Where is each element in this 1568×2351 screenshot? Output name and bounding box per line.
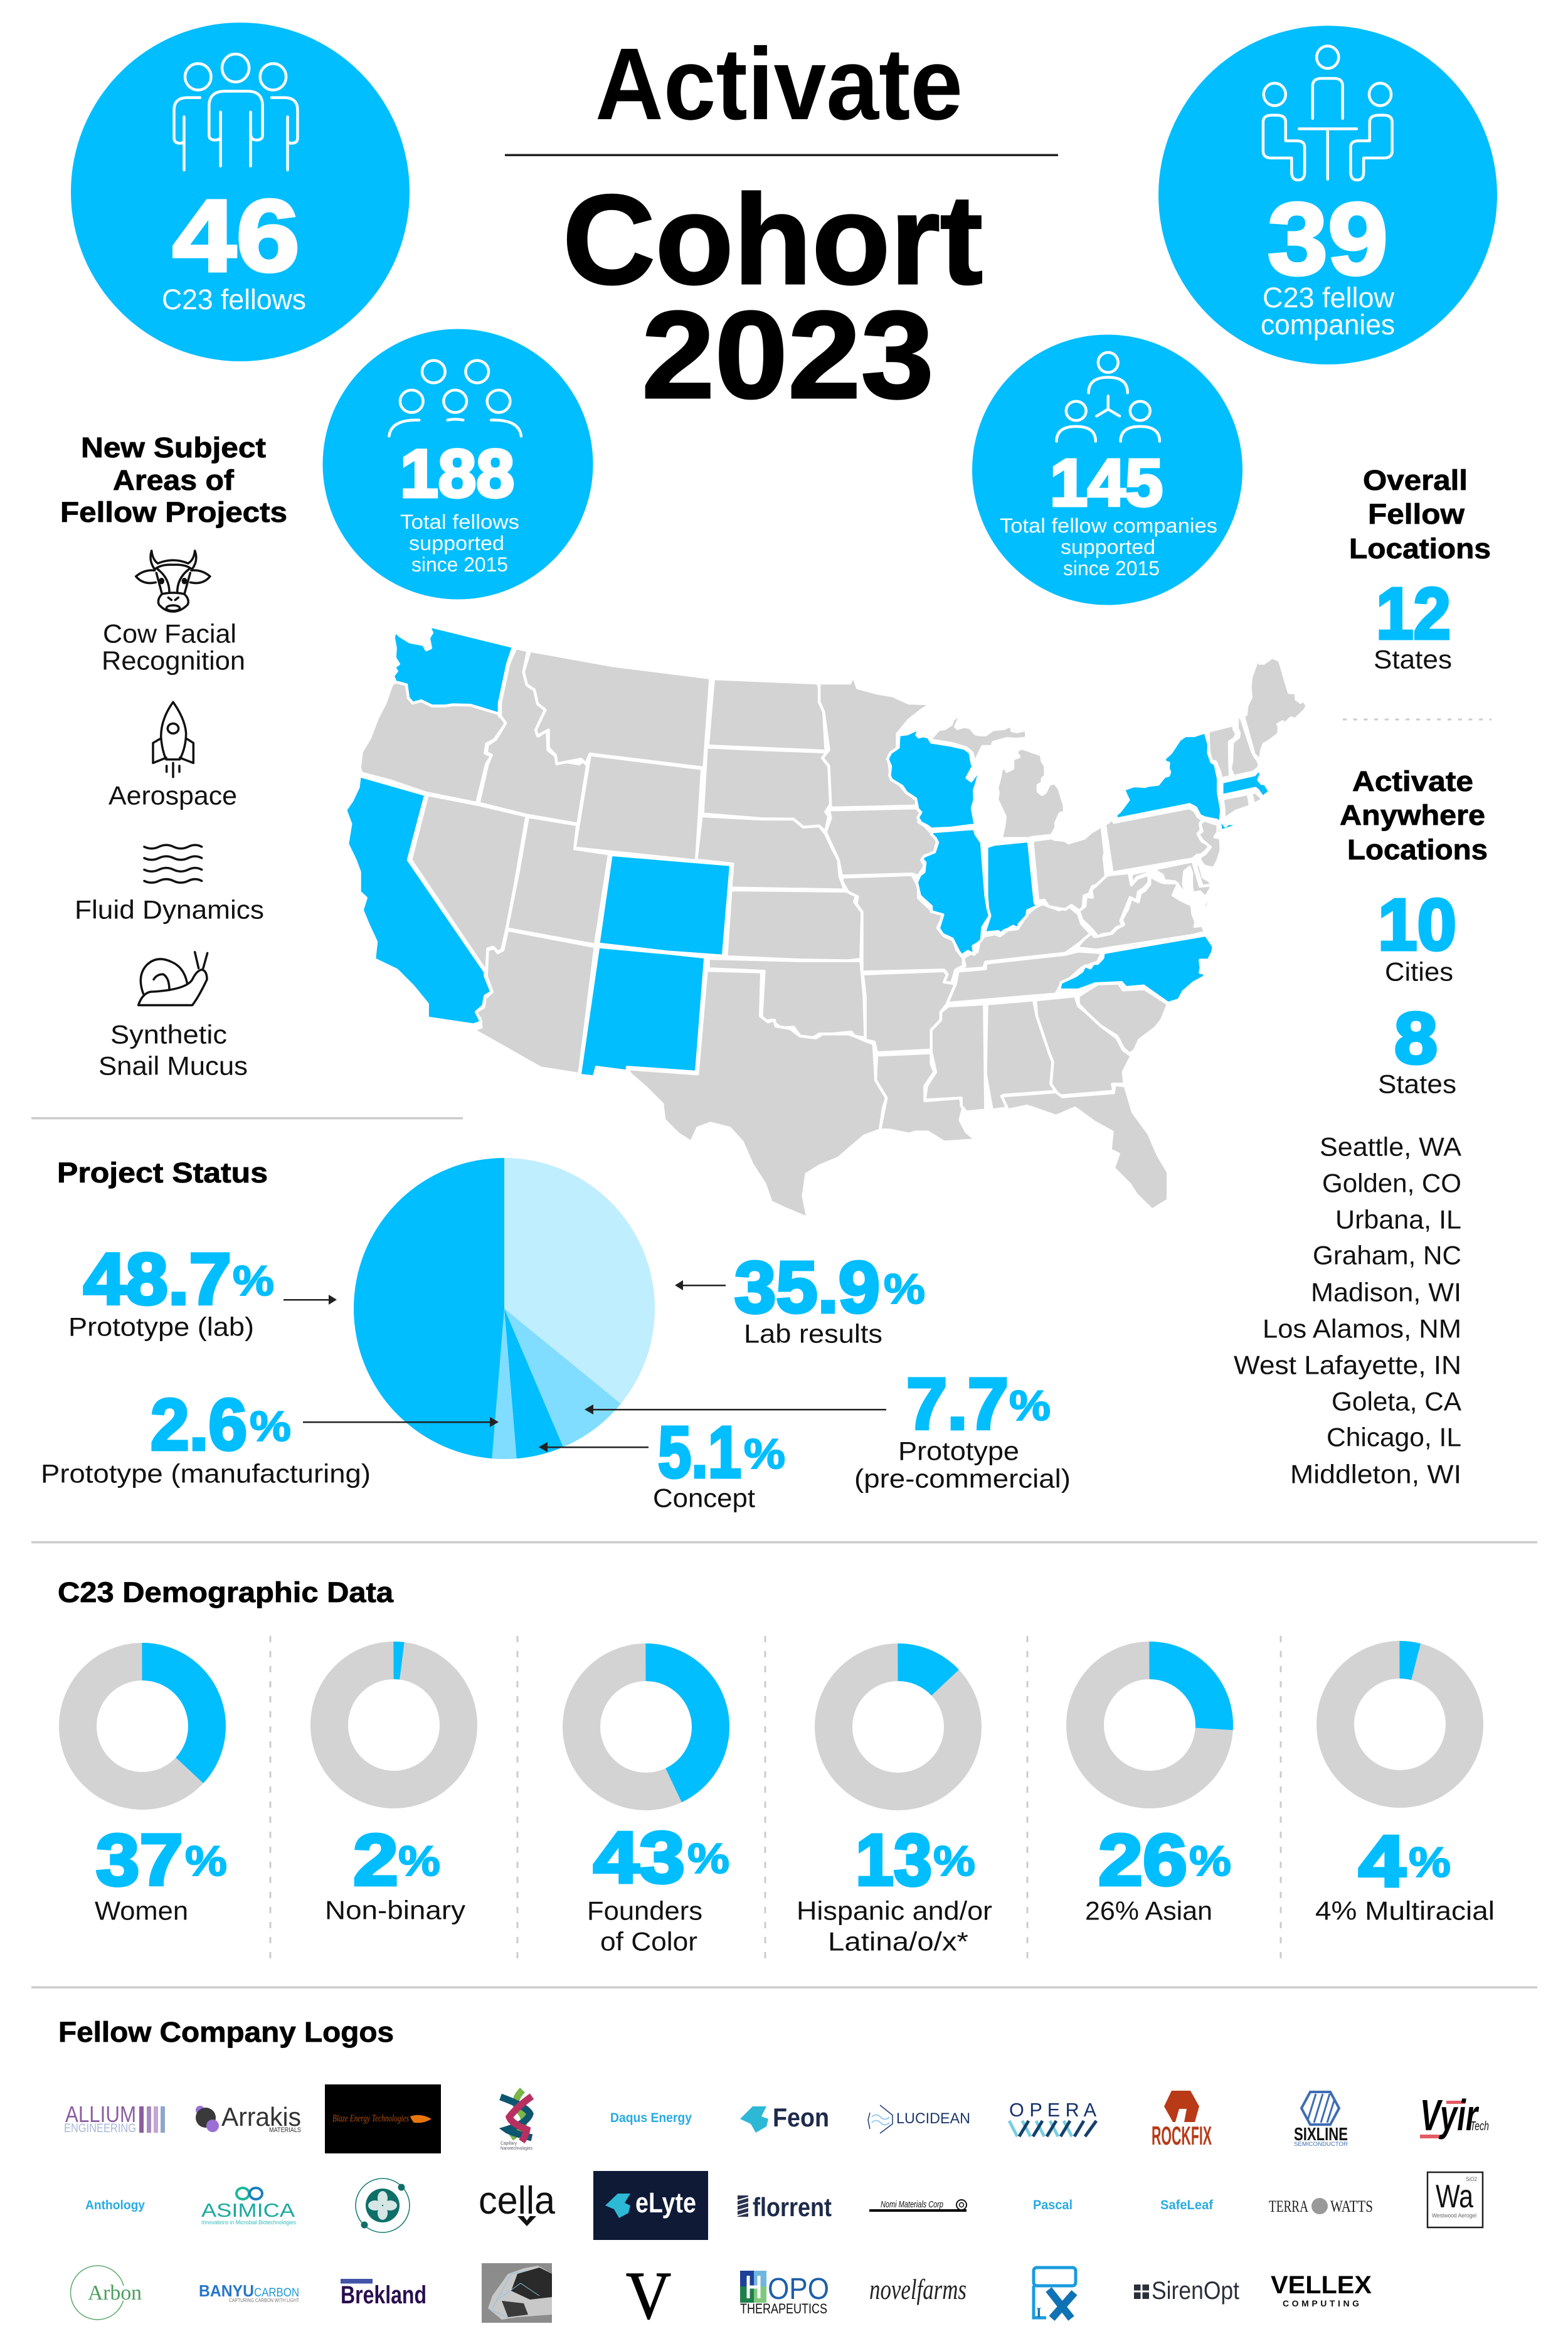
donut: founders of color 43%: 43 <box>593 1817 685 1898</box>
logo: Terra Watts <box>1269 2197 1373 2216</box>
callout: 35.9% lab results: 35.9 <box>734 1246 880 1328</box>
city list: Urbana, IL <box>1335 1204 1461 1234</box>
logo: Arrakis Materials: MATERIALS <box>269 2126 301 2134</box>
logo: Capillary Nanotechnologies: Nanotechnologies <box>501 2147 532 2151</box>
gray states: Michigan and Ohio <box>931 713 1106 911</box>
logo: Allium Engineering: ENGINEERING <box>64 2122 136 2135</box>
logo: SafeLeaf: SafeLeaf <box>1160 2198 1214 2212</box>
logo: Westwood Aerogel <box>1428 2172 1483 2227</box>
donut: founders of color 43%: Founders <box>587 1896 702 1926</box>
highlighted state: Wisconsin <box>887 729 980 829</box>
callout: 7.7% prototype pre-commercial <box>854 1363 1071 1493</box>
logo: novelfarms: novelfarms <box>869 2273 967 2305</box>
panel: new subject areas <box>60 432 287 1080</box>
logo: Vellex Computing: VELLEX <box>1271 2271 1372 2299</box>
arrow <box>283 1295 337 1305</box>
icon: waves <box>144 845 202 883</box>
stat circle: 145 total fellow companies: since 2015 <box>1063 557 1160 580</box>
panel: overall fellow locations: States <box>1374 645 1452 674</box>
logo: Westwood Aerogel: Westwood Aerogel <box>1432 2212 1476 2219</box>
panel: fellow company logos <box>58 2016 1489 2333</box>
city list: Golden, CO <box>1322 1168 1461 1198</box>
panel: new subject areas: Recognition <box>102 646 245 675</box>
heading: activate anywhere locations <box>1340 765 1488 866</box>
heading: new subject areas <box>60 432 287 528</box>
stat circle: 188 total fellows: since 2015 <box>411 553 508 576</box>
donut: hispanic and/or latina/o/x 13% <box>797 1662 992 1956</box>
panel: activate anywhere locations: 8 <box>1394 997 1438 1079</box>
donut: hispanic and/or latina/o/x 13%: 13 <box>856 1819 932 1901</box>
highlighted state: Colorado <box>598 855 731 956</box>
donut: founders of color 43%: of Color <box>600 1927 697 1956</box>
title: Cohort <box>563 169 983 311</box>
highlighted state: North Carolina <box>1059 935 1214 1003</box>
heading: activate anywhere locations: Activate <box>1352 765 1473 797</box>
logo: SirenOpt: SirenOpt <box>1152 2277 1239 2305</box>
donut: asian 26% <box>1085 1660 1231 1926</box>
stat circle: 46 C23 fellows: 46 <box>172 178 300 293</box>
logo: Lucidean <box>868 2105 970 2133</box>
callout: 7.7% prototype pre-commercial: Prototype <box>898 1436 1019 1465</box>
callout: 48.7% prototype lab: Prototype (lab) <box>68 1312 254 1341</box>
highlighted state: Illinois <box>917 829 990 955</box>
logo: Blaze Energy Technologies: Blaze Energy Technologies <box>332 2113 409 2124</box>
callout: 5.1% concept <box>653 1411 785 1513</box>
logo: Capillary Nanotechnologies: Capillary <box>501 2141 517 2146</box>
callout: 5.1% concept: Concept <box>653 1483 755 1513</box>
logo: Rockfix: ROCKFIX <box>1152 2121 1212 2150</box>
logo: Lucidean: LUCIDEAN <box>896 2110 970 2127</box>
donut: non-binary 2%: % <box>398 1837 440 1885</box>
title <box>563 169 983 424</box>
logo: Hopo Therapeutics: THERAPEUTICS <box>740 2301 827 2317</box>
stat circle: 145 total fellow companies: Total fellow companies <box>1000 514 1217 537</box>
panel: fellow company logos: Fellow Company Logos <box>58 2016 394 2048</box>
logo: Asimica: Innovations in Microbial Biotechnologies <box>201 2219 296 2226</box>
stat circle: 188 total fellows: 188 <box>400 435 514 511</box>
stat circle: 145 total fellow companies: 145 <box>1050 446 1163 520</box>
highlighted state: Washington <box>393 626 513 714</box>
panel: activate anywhere locations: States <box>1378 1069 1456 1099</box>
donut: asian 26%: 26 <box>1098 1819 1187 1901</box>
panel: new subject areas: Cow Facial <box>103 618 236 649</box>
logo: Hopo Therapeutics <box>740 2271 829 2317</box>
donut: hispanic and/or latina/o/x 13%: % <box>933 1837 975 1885</box>
donut: hispanic and/or latina/o/x 13%: Latina/o/x* <box>828 1927 968 1956</box>
logo: Cella: cella <box>479 2179 555 2222</box>
donut: women 37%: Women <box>95 1896 188 1926</box>
donut: asian 26%: % <box>1189 1837 1231 1885</box>
pie chart <box>354 1158 655 1459</box>
panel: new subject areas: Fluid Dynamics <box>75 894 264 925</box>
panel: overall fellow locations <box>1349 464 1491 674</box>
logo: SixLine Semiconductor: SEMICONDUCTOR <box>1294 2141 1348 2147</box>
heading: overall fellow locations <box>1349 464 1491 565</box>
donut: hispanic and/or latina/o/x 13%: Hispanic and/or <box>797 1896 992 1926</box>
gray states: west, plains, south <box>359 648 1168 1218</box>
callout: 35.9% lab results <box>734 1246 925 1349</box>
logo: eLyte <box>593 2171 708 2240</box>
logo: Daqus Energy: Daqus Energy <box>610 2111 692 2125</box>
logo: IX mark: I <box>1036 2305 1042 2320</box>
logo: florrent: florrent <box>753 2192 832 2222</box>
panel: project status <box>41 1157 1071 1513</box>
callout: 48.7% prototype lab: % <box>233 1257 274 1305</box>
callout: 5.1% concept: 5.1 <box>658 1411 741 1493</box>
logo: Arrakis Materials: Arrakis <box>221 2102 301 2131</box>
logo: Nomi Materials Corp: Nomi Materials Corp <box>881 2199 943 2210</box>
icon: people around table <box>1263 46 1392 180</box>
logo: Vyir Tech: Tech <box>1470 2120 1489 2133</box>
highlighted state: New York <box>1116 732 1246 831</box>
city list: Goleta, CA <box>1332 1386 1461 1416</box>
logo: Activate wordmark: Activate <box>595 26 963 141</box>
title: 2023 <box>642 285 934 424</box>
logo: Feon <box>740 2103 829 2133</box>
stat circle: 145 total fellow companies: supported <box>1061 536 1155 558</box>
logo: Westwood Aerogel: SiO2 <box>1466 2176 1477 2182</box>
logo: Terra Watts: WATTS <box>1330 2197 1373 2216</box>
stat circle: 145 total fellow companies <box>972 335 1242 605</box>
highlighted state: California <box>346 776 492 1025</box>
logo: Vyir Tech: Vyir <box>1420 2091 1480 2140</box>
arrow <box>303 1417 499 1427</box>
stat circle: 39 C23 fellow companies: 39 <box>1268 181 1388 296</box>
stat circle: 39 C23 fellow companies: companies <box>1261 309 1395 341</box>
panel: demographic data <box>58 1576 1495 1960</box>
callout: 2.6% prototype manufacturing <box>41 1384 371 1488</box>
city list: West Lafayette, IN <box>1234 1350 1461 1380</box>
logo: Arbon: Arbon <box>88 2281 142 2305</box>
donut: founders of color 43%: % <box>687 1835 729 1882</box>
logo: Blaze Energy Technologies <box>325 2084 441 2153</box>
donut: asian 26%: 26% Asian <box>1085 1896 1212 1926</box>
donut: non-binary 2% <box>325 1660 465 1924</box>
logo: Asimica: ASIMICA <box>201 2199 295 2221</box>
arrow <box>539 1442 649 1452</box>
logo: Banyu Carbon: CARBON <box>254 2286 299 2300</box>
arrow <box>675 1280 726 1290</box>
highlighted state: Massachusetts <box>1222 770 1274 799</box>
logo: V mark: V <box>626 2259 671 2333</box>
logo: Capillary Nanotechnologies <box>501 2090 532 2151</box>
city list <box>1234 1132 1461 1489</box>
panel: demographic data: C23 Demographic Data <box>58 1576 394 1608</box>
donut: multiracial 4%: 4 <box>1359 1820 1406 1902</box>
callout: 2.6% prototype manufacturing: Prototype (manufacturing) <box>41 1459 371 1488</box>
callout: 2.6% prototype manufacturing: 2.6 <box>151 1384 247 1465</box>
logo: Westwood Aerogel: Wa <box>1436 2179 1473 2215</box>
callout: 48.7% prototype lab: 48.7 <box>83 1238 231 1320</box>
heading: activate anywhere locations: Anywhere <box>1340 799 1485 831</box>
logo: IX mark <box>1034 2268 1076 2320</box>
callout: 7.7% prototype pre-commercial: (pre-commercial) <box>854 1464 1071 1493</box>
gray states: northeast and mid-Atlantic <box>1077 657 1307 950</box>
logo: Brekland: Brekland <box>341 2281 426 2309</box>
logo: Feon: Feon <box>773 2103 829 2132</box>
logo: Banyu Carbon: BANYU <box>199 2281 254 2300</box>
panel: activate anywhere locations <box>1234 765 1488 1489</box>
logo: Opera Bioscience: O P E R A <box>1009 2099 1096 2121</box>
stat circle: 188 total fellows: Total fellows <box>400 511 519 533</box>
stat circle: 188 total fellows <box>322 329 593 600</box>
icon: rocket <box>153 702 193 777</box>
arrow <box>585 1404 886 1414</box>
panel: new subject areas: Snail Mucus <box>98 1051 248 1080</box>
stat circle: 39 C23 fellow companies: C23 fellow <box>1263 282 1394 314</box>
heading: new subject areas: New Subject <box>81 432 266 464</box>
highlighted state: New Mexico <box>580 947 705 1077</box>
icon: cow <box>136 551 210 612</box>
heading: overall fellow locations: Locations <box>1349 533 1491 565</box>
logo: Arbon <box>70 2266 142 2320</box>
logo: SixLine Semiconductor: SIXLINE <box>1294 2125 1348 2145</box>
callout: 5.1% concept: % <box>744 1430 785 1478</box>
heading: overall fellow locations: Overall <box>1363 464 1468 496</box>
logo: Arrakis Materials <box>196 2102 301 2134</box>
logo: Vellex Computing: COMPUTING <box>1283 2298 1359 2308</box>
panel: project status: Project Status <box>57 1157 268 1189</box>
callout: 48.7% prototype lab <box>68 1238 274 1341</box>
city list: Middleton, WI <box>1290 1459 1461 1489</box>
donut: multiracial 4%: % <box>1409 1839 1451 1886</box>
logo: Pascal: Pascal <box>1033 2198 1073 2212</box>
donut: multiracial 4%: 4% Multiracial <box>1315 1896 1495 1926</box>
image: cow head with facial mesh <box>482 2263 552 2323</box>
donut: women 37%: 37 <box>96 1819 183 1901</box>
logo: Allium Engineering <box>64 2101 165 2135</box>
heading: new subject areas: Fellow Projects <box>60 496 287 528</box>
panel: overall fellow locations: 12 <box>1376 573 1451 654</box>
panel: activate anywhere locations: 10 <box>1378 884 1456 965</box>
icon: connected three people <box>1057 353 1160 441</box>
donut: non-binary 2%: Non-binary <box>325 1896 465 1924</box>
logo: Hopo Therapeutics: OPO <box>768 2273 829 2306</box>
city list: Graham, NC <box>1313 1241 1461 1270</box>
city list: Madison, WI <box>1311 1277 1461 1307</box>
map: United States with highlighted states <box>346 626 1307 1218</box>
logo: Rockfix <box>1152 2091 1212 2150</box>
donut: women 37%: % <box>185 1837 227 1885</box>
heading: activate anywhere locations: Locations <box>1347 834 1488 866</box>
donut: founders of color 43% <box>581 1662 729 1956</box>
logo: Banyu Carbon <box>199 2281 299 2303</box>
logo: Banyu Carbon: CAPTURING CARBON WITH LIGHT <box>229 2298 299 2303</box>
callout: 35.9% lab results: % <box>884 1265 925 1313</box>
icon: snail <box>139 952 208 1005</box>
logo: Allium Engineering: ALLIUM <box>65 2101 136 2127</box>
stat circle: 46 C23 fellows <box>71 23 410 361</box>
city list: Los Alamos, NM <box>1263 1313 1461 1344</box>
stat circle: 46 C23 fellows: C23 fellows <box>162 284 306 316</box>
logo: SixLine Semiconductor <box>1294 2092 1348 2147</box>
logo: Opera Bioscience <box>1009 2099 1096 2136</box>
highlighted state: Indiana <box>984 841 1037 933</box>
donut: women 37% <box>78 1662 227 1926</box>
logo: Asimica <box>201 2188 296 2226</box>
callout: 7.7% prototype pre-commercial: 7.7 <box>906 1363 1009 1445</box>
donut: multiracial 4% <box>1315 1660 1495 1926</box>
heading: overall fellow locations: Fellow <box>1368 498 1465 530</box>
stat circle: 188 total fellows: supported <box>409 532 504 555</box>
icon: three people <box>174 54 297 170</box>
callout: 35.9% lab results: Lab results <box>744 1319 882 1349</box>
icon: group of five people <box>389 361 521 436</box>
callout: 2.6% prototype manufacturing: % <box>250 1403 291 1450</box>
logo: Terra Watts: TERRA <box>1269 2197 1308 2216</box>
city list: Seattle, WA <box>1320 1132 1461 1162</box>
logo: circular teal emblem <box>356 2179 410 2232</box>
panel: activate anywhere locations: Cities <box>1385 957 1453 986</box>
panel: new subject areas: Synthetic <box>110 1020 227 1049</box>
panel: new subject areas: Aerospace <box>109 780 237 810</box>
city list: Chicago, IL <box>1327 1423 1461 1451</box>
logo: Anthology: Anthology <box>85 2199 146 2212</box>
logo: eLyte: eLyte <box>635 2187 696 2219</box>
donut: non-binary 2%: 2 <box>353 1819 398 1901</box>
stat circle: 39 C23 fellow companies <box>1158 26 1497 364</box>
callout: 7.7% prototype pre-commercial: % <box>1009 1382 1051 1430</box>
heading: new subject areas: Areas of <box>113 464 235 496</box>
